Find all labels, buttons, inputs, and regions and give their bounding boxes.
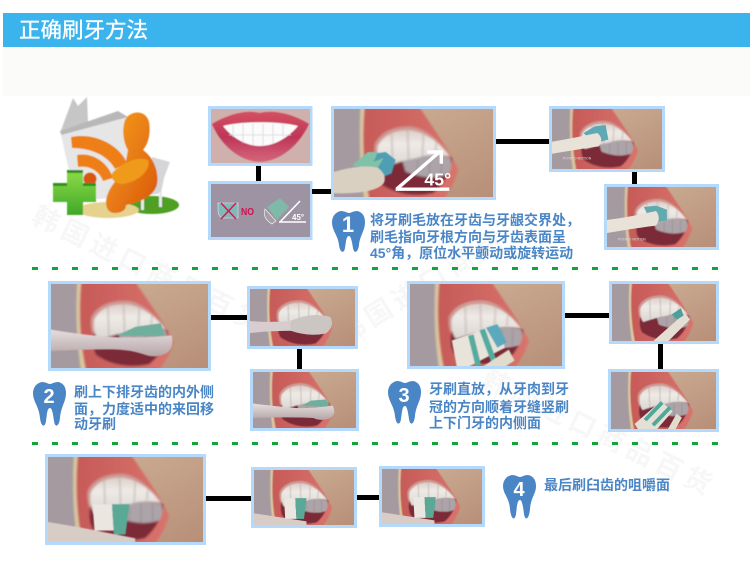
- text: step 4: 最后刷臼齿的咀嚼面: [544, 477, 670, 493]
- connector: [357, 495, 379, 500]
- icon: crossed out brush: [218, 203, 238, 219]
- panel: brush moved along teeth: [604, 184, 719, 250]
- tooth icon 1: 1: [342, 212, 354, 237]
- panel: brush diagonal: [609, 281, 719, 344]
- panel: bristle side: [247, 286, 358, 349]
- connector: [658, 344, 663, 369]
- panel: brush upright: [405, 279, 565, 371]
- divider: [32, 442, 730, 445]
- tooth icon 3: [388, 381, 421, 424]
- title: 正确刷牙方法: [19, 18, 148, 42]
- tooth icon 3: 3: [398, 385, 410, 407]
- tooth icon 1: [332, 211, 365, 252]
- panel: brush on upper teeth: [549, 106, 665, 172]
- connector: [256, 166, 261, 181]
- connector: [496, 139, 549, 144]
- text: step 3: 冠的方向顺着牙缝竖刷: [429, 399, 569, 415]
- connector: [632, 172, 637, 184]
- connector: [211, 315, 247, 320]
- panel: wrong and correct angle diagram: [208, 181, 312, 240]
- watermark: 韩国进口商品百货: [477, 363, 721, 503]
- panel: brush lower front: [608, 369, 719, 432]
- panel: inner side of teeth: [46, 279, 211, 373]
- tooth icon 2: [33, 382, 66, 426]
- connector: [312, 189, 331, 194]
- tooth icon 2: 2: [43, 386, 55, 408]
- connector: [206, 496, 251, 501]
- icon: RSS reader mascot with green plus: [53, 97, 179, 218]
- blank band under title: [3, 47, 750, 96]
- panel: smiling lips photo: [208, 106, 312, 166]
- panel: brush at 45 degrees: [329, 104, 496, 202]
- title bar: [3, 13, 750, 47]
- panel: brush on upper teeth: POTATO MOTION: [563, 157, 592, 161]
- text: step 2: 刷上下排牙齿的内外侧: [74, 384, 214, 400]
- text: step 1: 45°角，原位水平颤动或旋转运动: [370, 245, 573, 261]
- tooth icon 4: 4: [513, 479, 525, 501]
- panel: chewing surface large: [43, 452, 206, 547]
- watermark: [27, 200, 721, 503]
- icon: brush at 45 degrees: 45°: [292, 213, 304, 222]
- watermark: 韩国进口商品百货: [27, 200, 271, 340]
- NO label: NO: [241, 207, 254, 218]
- connector: [565, 313, 609, 318]
- watermark: 韩国进口商品: [332, 223, 511, 350]
- panel: brush moved along teeth: POTATO MOTION: [618, 237, 646, 241]
- text: step 3: 上下门牙的内侧面: [429, 415, 541, 431]
- divider: [32, 267, 730, 270]
- panel: lower inner side: [250, 369, 359, 431]
- tooth icon 4: [503, 475, 536, 518]
- panel: chewing surface middle: [251, 467, 357, 528]
- text: step 2: 面，力度适中的来回移: [74, 401, 214, 417]
- text: step 1: 刷毛指向牙根方向与牙齿表面呈: [370, 229, 566, 245]
- text: step 1: 将牙刷毛放在牙齿与牙龈交界处，: [370, 212, 580, 228]
- panel: brush at 45 degrees: 45°: [424, 169, 451, 189]
- text: step 2: 动牙刷: [74, 416, 116, 432]
- text: step 3: 牙刷直放，从牙肉到牙: [429, 381, 569, 397]
- panel: chewing surface right: [379, 466, 485, 527]
- 45 degree arrow: [396, 152, 449, 189]
- connector: [297, 349, 302, 369]
